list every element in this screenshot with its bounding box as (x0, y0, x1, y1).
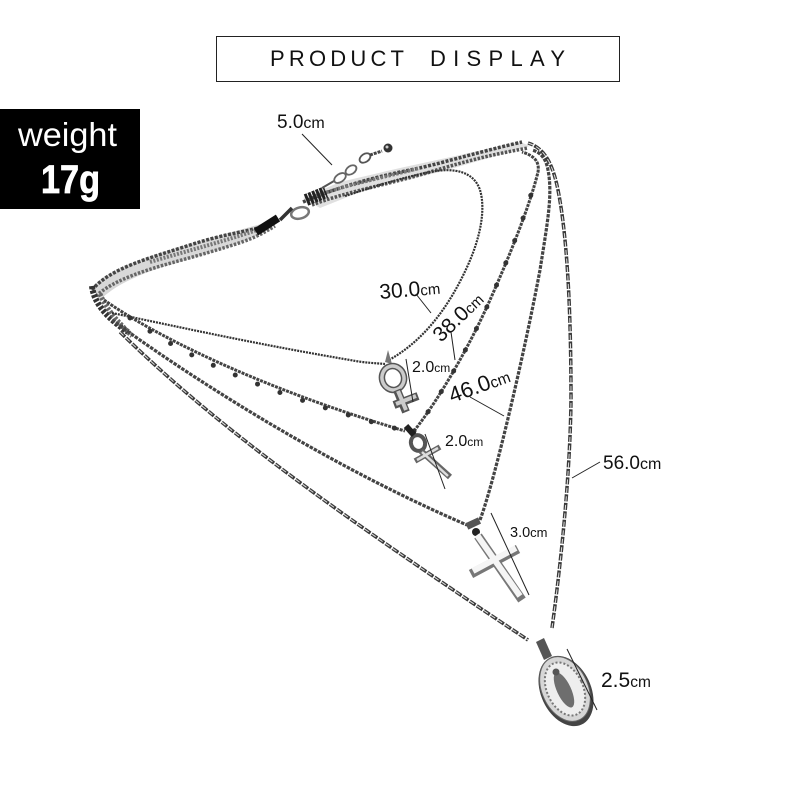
56cm chain (120, 143, 571, 640)
label: 46.0cm: 46.0cm (445, 362, 513, 408)
label: 2.5cm (567, 649, 651, 710)
label: 2.5cm: 2.5cm (601, 669, 651, 692)
label: 56.0cm: 56.0cm (603, 453, 661, 474)
weight badge (0, 109, 140, 209)
label: 2.0cm female symbol (406, 359, 450, 402)
label: 5.0cm (277, 112, 332, 165)
bundled chains left of clasp (92, 218, 278, 336)
label: 56.0cm (572, 453, 661, 478)
extender chain (322, 144, 392, 188)
title: PRODUCT (270, 46, 404, 71)
weight badge: weight (17, 116, 117, 153)
bundled chains right of clasp (303, 142, 530, 208)
lobster clasp (280, 205, 310, 221)
pendant: oval medal (528, 638, 604, 735)
necklace (92, 142, 604, 735)
label: 3.0cm (491, 513, 548, 595)
label: 38.0cm: 38.0cm (428, 288, 488, 347)
pendant: female symbol (379, 350, 418, 412)
46cm chain (112, 150, 550, 525)
weight badge: 17g (41, 158, 100, 202)
label: 2.0cm female symbol: 2.0cm (412, 359, 450, 376)
30cm chain (112, 170, 482, 364)
label: 30.0cm: 30.0cm (378, 276, 441, 304)
label: 5.0cm: 5.0cm (277, 112, 325, 133)
38cm chain (104, 152, 538, 431)
label: 3.0cm: 3.0cm (510, 525, 548, 541)
title (216, 36, 620, 82)
label: 2.0cm ankh (425, 433, 483, 489)
label: 2.0cm ankh: 2.0cm (445, 433, 483, 450)
title: DISPLAY (430, 46, 565, 71)
pendant: ankh (406, 426, 450, 477)
pendant: cross (465, 517, 522, 600)
